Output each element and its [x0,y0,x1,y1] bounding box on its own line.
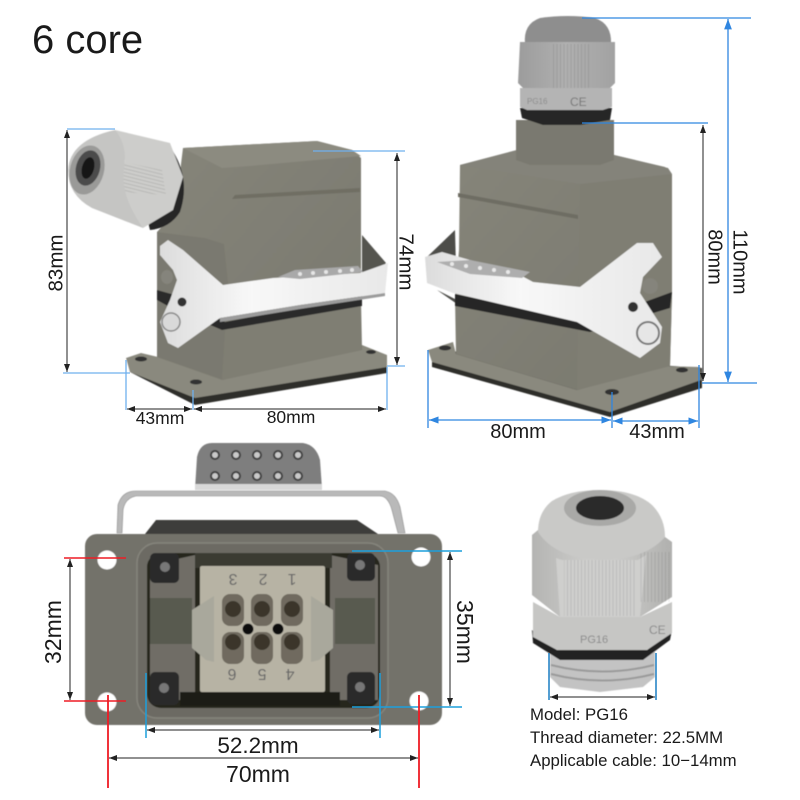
pin numbers: 5 [257,665,266,682]
dimensions 43mm and 80mm left: 43mm [136,408,184,428]
dimensions 80mm and 43mm right [428,350,699,443]
dimension 110mm [582,18,757,383]
pin numbers: 4 [285,665,294,682]
right housing [455,150,672,390]
dimension 70mm: 70mm [226,761,290,787]
dimension lines right view [428,18,757,443]
left connector side view [64,130,388,405]
dimension 74mm: 74mm [395,234,418,290]
right cable gland [518,16,615,125]
dimension lines left view [44,129,418,428]
contact insert [192,566,333,692]
threaded stem [550,650,655,692]
dimension 70mm [108,695,419,788]
gland o-ring [532,630,672,660]
steel handle loop [117,491,405,533]
dimensions 80mm and 43mm right: 43mm [629,421,685,443]
right cable gland: CE [570,95,587,109]
steel clip with dimples [195,443,322,490]
left steel latch [160,240,388,348]
rear housing edge [145,520,378,534]
dimensions 80mm and 43mm right: 80mm [490,421,546,443]
right connector side view [425,16,702,417]
pin numbers: 1 [287,570,296,587]
left housing [157,141,362,380]
bottom connector mating face view [85,443,442,725]
hex nut [532,530,672,617]
dimensions 43mm and 80mm left [126,360,387,428]
dimension 32mm: 32mm [40,600,66,664]
dimension 52.2mm [146,673,380,758]
left base plate [126,345,387,405]
gland specification text [530,705,737,770]
dimension 35mm [352,551,478,707]
right steel latch [425,243,662,358]
pin numbers: 2 [258,570,267,587]
gland specification text: Thread diameter: 22.5MM [530,728,723,747]
right base plate [428,342,702,417]
dimension 80mm vertical: 80mm [704,229,726,285]
metal frame [150,553,378,706]
raised rim [137,543,388,718]
gland specification text: Applicable cable: 10−14mm [530,751,737,770]
right cable gland: PG16 [527,97,548,106]
dome [538,490,665,560]
right gasket band [455,292,672,332]
dimension 35mm: 35mm [452,600,478,664]
lower nut: CE [649,623,666,637]
right neck [516,120,614,165]
dimension 110mm: 110mm [729,229,751,295]
dimensions 43mm and 80mm left: 80mm [267,407,315,427]
dimension 52.2mm: 52.2mm [217,733,299,758]
cable opening [564,490,636,526]
mounting holes [98,548,430,712]
PG16 cable gland [532,490,672,692]
dimension 32mm [40,558,126,701]
pin numbers: 6 [227,665,236,682]
pin numbers: 3 [228,570,237,587]
left cable gland [64,130,184,230]
title: 6 core [32,18,143,62]
right handle back arm [427,230,457,304]
thread diameter marker [549,653,656,700]
gland specification text: Model: PG16 [530,705,628,724]
left gasket band [157,290,362,330]
dimension lines bottom view [40,551,656,788]
corner screw blocks [150,553,375,705]
mounting plate [85,534,442,725]
left handle back arm [362,235,386,274]
dimension 83mm: 83mm [44,235,67,291]
dimension 83mm [44,129,130,373]
lower nut [533,602,672,650]
lower nut: PG16 [580,634,608,646]
pin numbers [227,570,296,682]
dimension 74mm [313,151,418,366]
cavity [147,553,380,708]
contact sockets [222,594,303,664]
